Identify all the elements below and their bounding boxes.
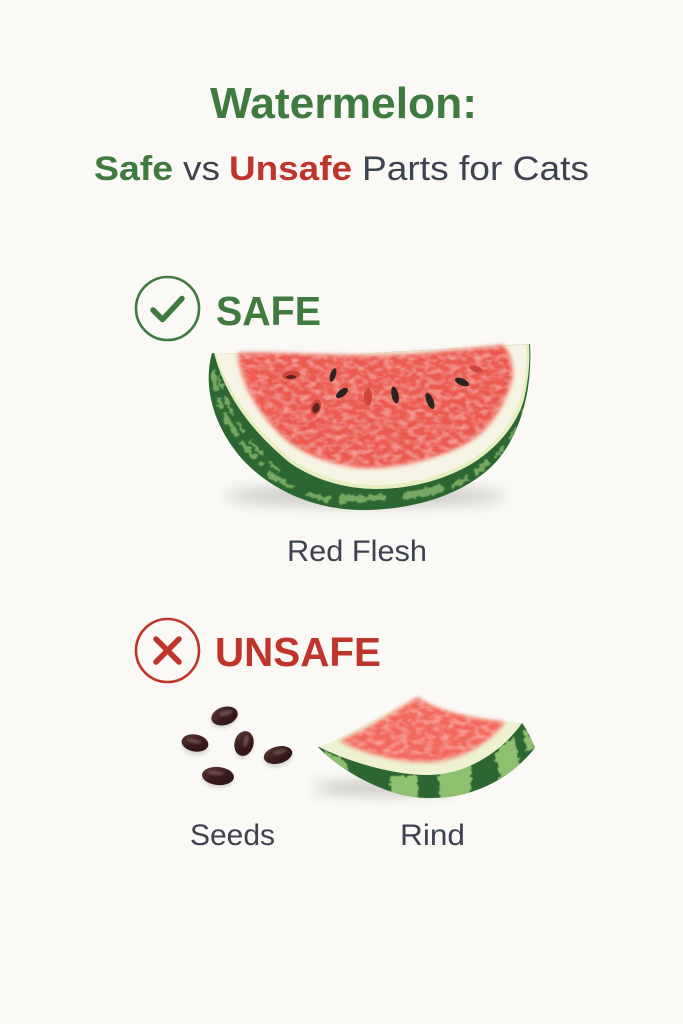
subtitle: vs — [183, 150, 220, 188]
seeds in flesh — [281, 364, 484, 416]
subtitle: Unsafe — [229, 150, 352, 188]
illustration: seeds — [180, 703, 294, 788]
illustration: watermelon slice with red flesh — [209, 344, 530, 510]
label: rind: Rind — [400, 819, 465, 852]
icon: cross in circle — [136, 619, 199, 682]
infographic canvas — [95, 86, 588, 846]
icon: check mark in circle — [136, 277, 199, 340]
panel: safe — [136, 277, 530, 568]
illustration: rind wedge — [313, 697, 535, 802]
heading: safe: SAFE — [216, 288, 321, 334]
subtitle — [94, 150, 589, 188]
heading: unsafe: UNSAFE — [215, 629, 381, 675]
panel: unsafe — [136, 619, 535, 852]
subtitle: Safe — [94, 150, 173, 188]
title — [94, 79, 589, 188]
label: red flesh: Red Flesh — [287, 535, 427, 568]
heading: Watermelon: Watermelon: — [210, 79, 477, 128]
subtitle: Parts for Cats — [362, 150, 589, 188]
label: seeds: Seeds — [190, 819, 275, 852]
